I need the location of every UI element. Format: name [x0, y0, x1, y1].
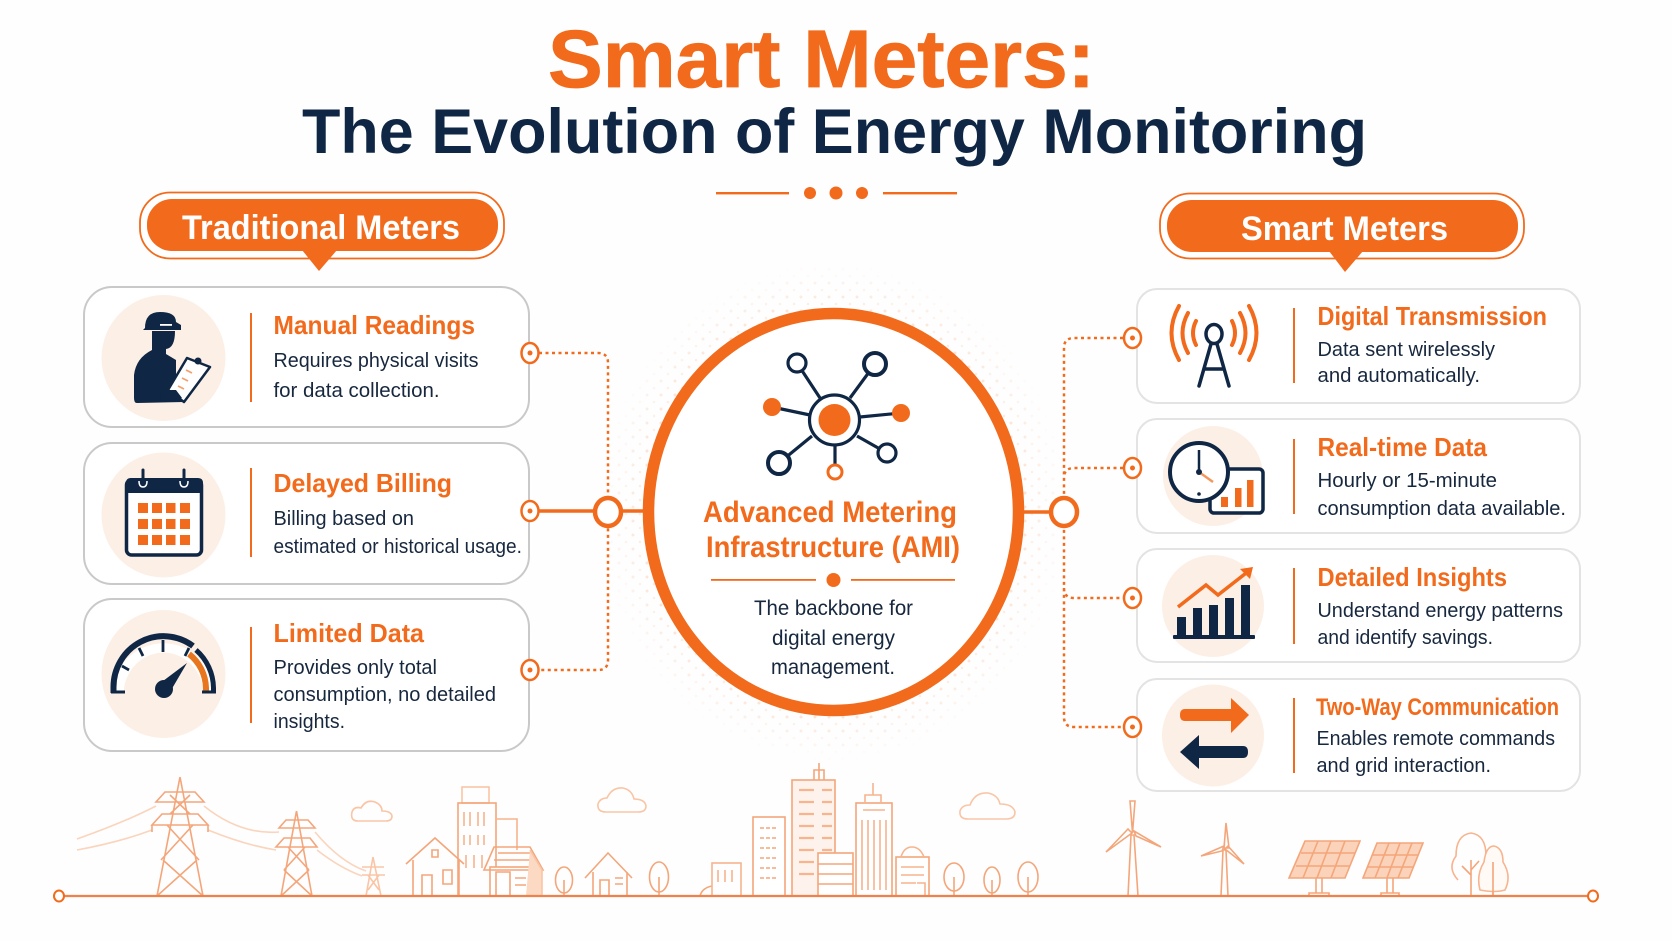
hub description: The backbone for: [754, 596, 913, 620]
panel: Digital Transmission: [1137, 289, 1580, 403]
panel: Digital Transmission: Digital Transmission: [1318, 301, 1547, 331]
panel: Manual Readings: [84, 287, 529, 427]
hub heading: [703, 496, 960, 564]
icon: two-way arrows: [1162, 684, 1264, 786]
hub description: [754, 596, 913, 679]
hub heading: Infrastructure (AMI): [706, 531, 960, 564]
panel: Digital Transmission: Data sent wirelessly: [1318, 338, 1496, 361]
title divider: [716, 186, 957, 200]
connectors: right: [1021, 328, 1141, 737]
panel: Two-Way Communication: and grid interaction.: [1316, 754, 1491, 777]
trees: [556, 862, 668, 896]
panel: Delayed Billing: Billing based on: [274, 507, 414, 530]
transmission tower small: [362, 857, 385, 896]
panel: Manual Readings: for data collection.: [274, 379, 440, 402]
icon: gauge: [102, 610, 226, 738]
power lines: [77, 806, 366, 876]
cloud: [960, 793, 1015, 819]
panel: Limited Data: [84, 599, 529, 751]
cloud: [598, 788, 646, 812]
hub description: management.: [771, 655, 895, 679]
transmission tower large: [152, 777, 208, 896]
solar panel large: [1289, 841, 1360, 896]
panel: Detailed Insights: Detailed Insights: [1318, 562, 1507, 592]
panel: Real-time Data: consumption data available.: [1318, 497, 1566, 520]
header pill: Traditional Meters: Traditional Meters: [182, 209, 460, 247]
panel: Limited Data: Provides only total: [274, 656, 437, 679]
panel: Delayed Billing: [84, 443, 529, 584]
hub description: digital energy: [772, 626, 895, 650]
ground line: [54, 890, 1598, 902]
panel: Manual Readings: Requires physical visits: [274, 349, 478, 372]
central hub: AMI: [648, 314, 1018, 710]
solar panel small: [1363, 843, 1423, 896]
subtitle: The Evolution of Energy Monitoring: [302, 97, 1367, 167]
panel: Limited Data: insights.: [274, 710, 345, 733]
trees: [944, 862, 1038, 896]
city centre towers: [700, 763, 929, 896]
title: Smart Meters: Smart Meters:: [548, 14, 1095, 105]
panel: Detailed Insights: and identify savings.: [1318, 626, 1493, 649]
dotted halo behind hub: [611, 275, 1054, 746]
city left group: [406, 787, 543, 896]
hub heading: Advanced Metering: [703, 496, 957, 529]
panel: Two-Way Communication: Two-Way Communication: [1316, 694, 1559, 721]
panel: Real-time Data: Real-time Data: [1318, 432, 1487, 462]
clouds: [352, 801, 392, 821]
icon: meter reader: [102, 295, 226, 421]
panel: Real-time Data: Hourly or 15-minute: [1318, 469, 1497, 492]
icon: calendar: [102, 452, 226, 578]
panel: Two-Way Communication: [1137, 679, 1580, 791]
header pill: Smart Meters: Smart Meters: [1241, 210, 1448, 248]
panel: Limited Data: Limited Data: [274, 618, 425, 648]
panel: Detailed Insights: [1137, 549, 1580, 662]
transmission tower medium: [276, 811, 317, 896]
panel: Digital Transmission: and automatically.: [1318, 364, 1480, 387]
wind turbine small: [1201, 823, 1244, 896]
panel: Delayed Billing: estimated or historical usage.: [274, 535, 522, 558]
hub divider: [711, 573, 955, 587]
icon: clock and chart: [1163, 426, 1263, 526]
header pill: Traditional Meters: [140, 192, 504, 271]
panel: Real-time Data: [1137, 419, 1580, 533]
small house: [585, 853, 632, 896]
header pill: Smart Meters: [1160, 194, 1524, 272]
panel: Limited Data: consumption, no detailed: [274, 683, 496, 706]
icon: radio tower: [1172, 306, 1256, 386]
wind turbine large: [1106, 801, 1161, 896]
skyline illustration: [77, 763, 1508, 896]
trees large: [1452, 833, 1508, 896]
connectors: left: [522, 343, 646, 680]
panel: Delayed Billing: Delayed Billing: [274, 468, 452, 498]
panel: Two-Way Communication: Enables remote commands: [1316, 727, 1555, 750]
panel: Detailed Insights: Understand energy patterns: [1318, 599, 1563, 622]
icon: network: [763, 353, 910, 479]
icon: growth chart: [1162, 555, 1264, 657]
panel: Manual Readings: Manual Readings: [274, 310, 475, 340]
